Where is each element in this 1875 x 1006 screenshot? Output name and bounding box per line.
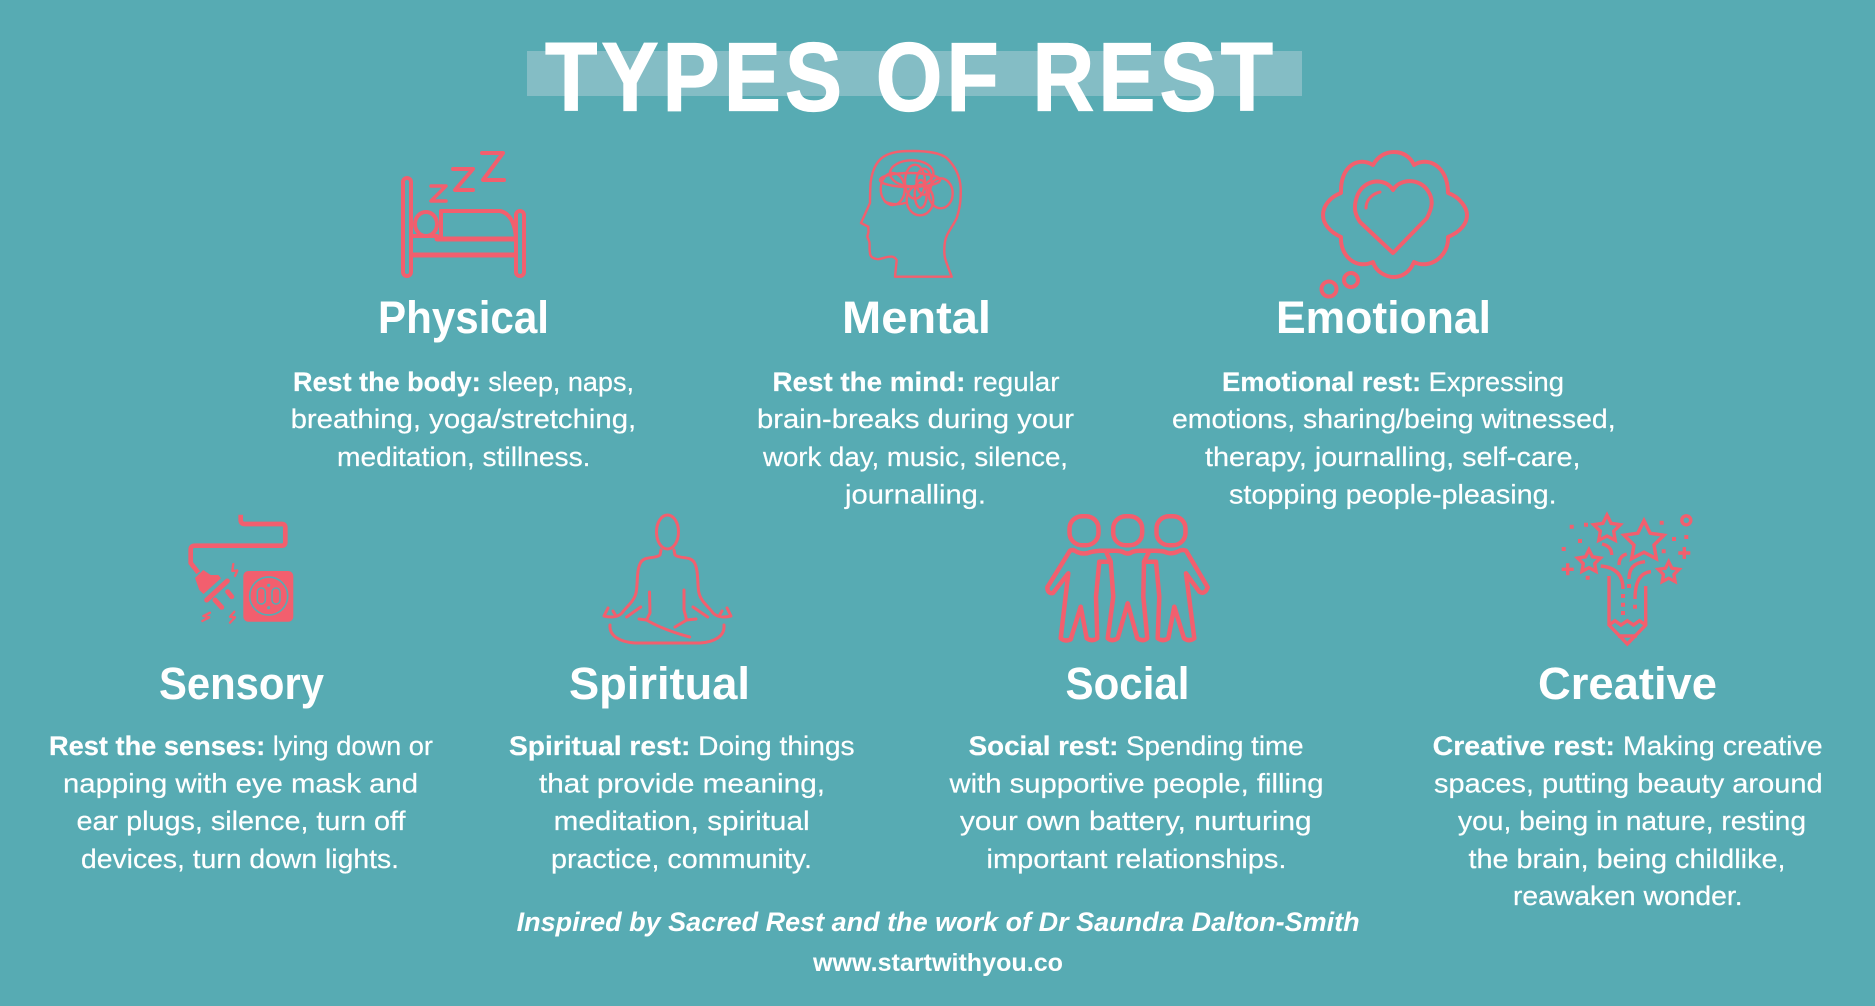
panel: sensory xyxy=(49,515,433,874)
text: spiritual description xyxy=(509,731,855,874)
text: mental description xyxy=(757,367,1074,510)
panel: creative xyxy=(1433,515,1823,911)
text: emotional description: Emotional rest: Expressing xyxy=(1222,367,1564,397)
text: sensory description: napping with eye mask and xyxy=(63,768,418,798)
text: social description: important relationships. xyxy=(986,844,1286,874)
text: sensory description xyxy=(49,731,433,874)
text: sensory description: Rest the senses: lying down or xyxy=(49,731,433,761)
text: mental description: journalling. xyxy=(844,480,986,510)
heading: emotional: Emotional xyxy=(1276,292,1491,343)
panel: physical xyxy=(291,153,636,472)
text: emotional description xyxy=(1172,367,1616,510)
text: emotional description: therapy, journalling, self-care, xyxy=(1205,442,1580,472)
text: social description: with supportive people, filling xyxy=(948,768,1324,798)
text: mental description: work day, music, silence, xyxy=(762,442,1068,472)
heading: creative: Creative xyxy=(1538,658,1717,709)
text: spiritual description: Spiritual rest: Doing things xyxy=(509,731,855,761)
panel: mental xyxy=(757,151,1074,510)
text: spiritual description: meditation, spiritual xyxy=(554,806,810,836)
footer credit: www.startwithyou.co xyxy=(812,949,1063,977)
heading: social: Social xyxy=(1066,658,1190,709)
heading: mental: Mental xyxy=(842,292,991,343)
footer credit xyxy=(517,907,1360,977)
panel: social xyxy=(948,516,1324,874)
panel: spiritual xyxy=(509,515,855,874)
text: mental description: Rest the mind: regular xyxy=(772,367,1060,397)
text: creative description: reawaken wonder. xyxy=(1513,881,1743,911)
text: physical description: meditation, stillness. xyxy=(337,442,590,472)
text: physical description: Rest the body: sleep, naps, xyxy=(293,367,634,397)
text: physical description: breathing, yoga/stretching, xyxy=(291,404,636,434)
text: sensory description: ear plugs, silence, turn off xyxy=(76,806,406,836)
footer credit: Inspired by Sacred Rest and the work of Dr Saundra Dalton-Smith xyxy=(517,907,1360,937)
text: spiritual description: that provide meaning, xyxy=(539,768,825,798)
text: creative description: you, being in nature, resting xyxy=(1458,806,1806,836)
icon: plug and socket xyxy=(191,515,293,623)
text: creative description: Creative rest: Making creative xyxy=(1433,731,1823,761)
text: mental description: brain-breaks during your xyxy=(757,404,1074,434)
icon: head with tangled brain xyxy=(861,151,961,277)
icon: bed with sleeping person xyxy=(403,153,524,276)
icon: three people embracing xyxy=(1047,516,1208,640)
heading: physical: Physical xyxy=(378,292,549,343)
text: social description xyxy=(948,731,1324,874)
heading: spiritual: Spiritual xyxy=(569,658,750,709)
text: creative description xyxy=(1433,731,1823,911)
text: sensory description: devices, turn down lights. xyxy=(81,844,399,874)
text: creative description: spaces, putting beauty around xyxy=(1434,768,1823,798)
panel: emotional xyxy=(1172,152,1616,510)
text: physical description xyxy=(291,367,636,472)
text: social description: your own battery, nurturing xyxy=(960,806,1312,836)
text: spiritual description: practice, community. xyxy=(551,844,812,874)
heading: sensory: Sensory xyxy=(159,658,324,709)
text: emotional description: stopping people-pleasing. xyxy=(1229,480,1557,510)
icon: meditating figure xyxy=(604,515,731,643)
icon: thought bubble with heart xyxy=(1322,152,1467,296)
title: TYPES OF REST xyxy=(545,22,1277,132)
text: emotional description: emotions, sharing/being witnessed, xyxy=(1172,404,1616,434)
text: social description: Social rest: Spending time xyxy=(969,731,1304,761)
text: creative description: the brain, being childlike, xyxy=(1468,844,1786,874)
icon: pencil with stars xyxy=(1562,515,1691,644)
